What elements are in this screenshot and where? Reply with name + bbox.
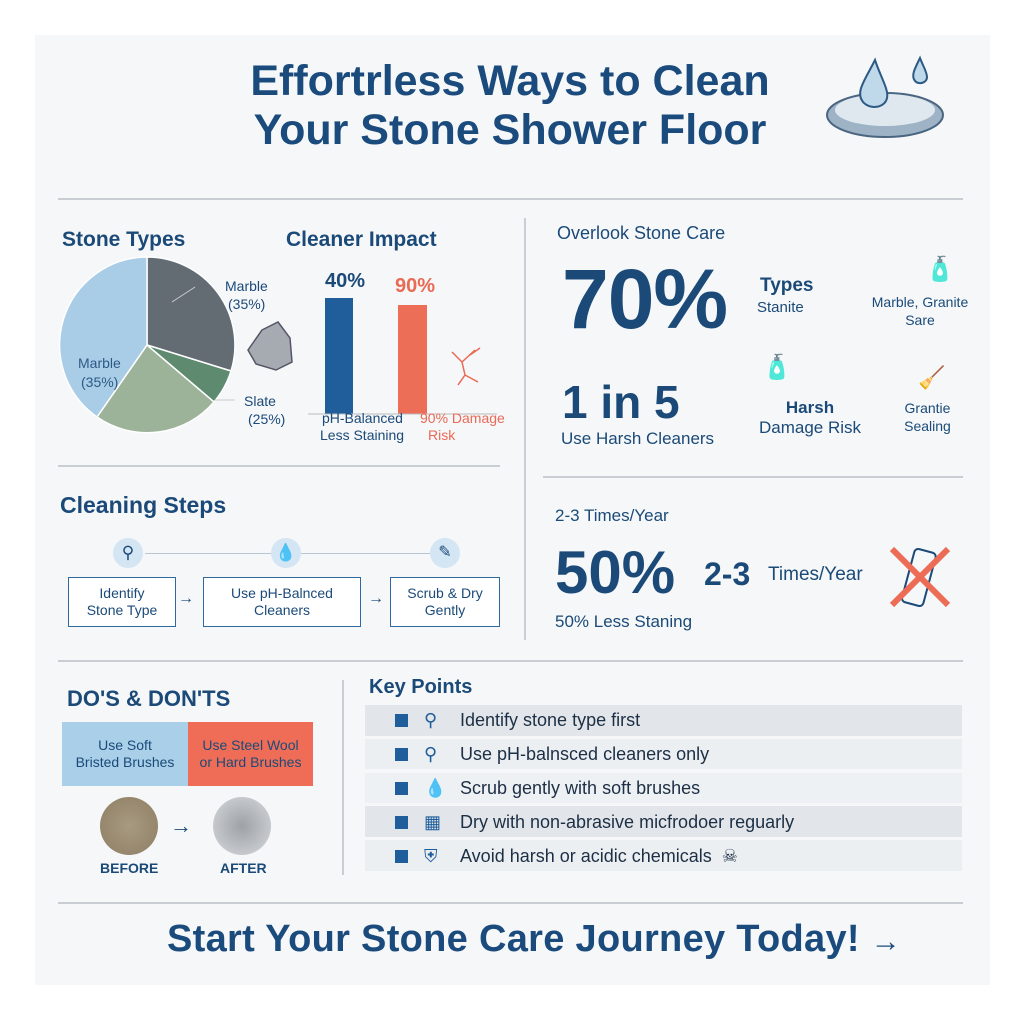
panel: overlook stone care stats: Use Harsh Cleaners (561, 429, 714, 448)
pie chart: (35%) (81, 374, 118, 390)
panel: key points: Avoid harsh or acidic chemicals ☠ (460, 846, 738, 866)
cleaning steps flow: 💧 (275, 543, 297, 562)
panel: frequency stats (555, 506, 950, 631)
panel: key points: ▦ (424, 812, 441, 832)
icon: water drops on stone (826, 56, 944, 138)
bar chart: Risk (428, 427, 456, 443)
title (250, 57, 770, 154)
title: Effortrless Ways to Clean (250, 57, 770, 105)
panel: frequency stats: 50% (555, 539, 675, 606)
bar chart: 90% (395, 275, 435, 297)
bar chart (308, 270, 505, 443)
panel: overlook stone care stats: 🧴 (925, 256, 955, 283)
panel: dos and donts: DO'S & DON'TS (67, 686, 230, 711)
panel: dos and donts: Use Steel Wool (202, 737, 299, 753)
panel: key points: Scrub gently with soft brushes (460, 778, 700, 798)
panel: overlook stone care stats: 🧴 (762, 354, 792, 381)
panel: key points: ⚲ (424, 710, 437, 730)
panel: overlook stone care stats (557, 223, 968, 448)
panel: overlook stone care stats: 1 in 5 (562, 376, 680, 428)
bar chart: Less Staining (320, 427, 404, 443)
panel: dos and donts: or Hard Brushes (200, 754, 301, 770)
panel: key points: Dry with non-abrasive micfrodoer reguarly (460, 812, 794, 832)
panel: key points: Identify stone type first (460, 710, 640, 730)
panel: overlook stone care stats: Overlook Stone Care (557, 223, 725, 243)
panel: key points (365, 676, 962, 871)
panel: frequency stats: 50% Less Staning (555, 612, 692, 631)
panel: key points: Use pH-balnsced cleaners only (460, 744, 709, 764)
cleaning steps flow: ✎ (438, 544, 452, 561)
panel: dos and donts: BEFORE (100, 860, 158, 876)
heading: cleaning steps: Cleaning Steps (60, 492, 226, 518)
title: Your Stone Shower Floor (254, 106, 766, 154)
panel: overlook stone care stats: Harsh (786, 398, 834, 417)
panel: overlook stone care stats: Grantie (905, 400, 950, 416)
panel: dos and donts: AFTER (220, 860, 267, 876)
cleaning steps flow: → (368, 590, 384, 607)
pie chart: Marble (78, 355, 121, 371)
bar chart: 90% Damage (420, 410, 505, 426)
panel: frequency stats: 2-3 Times/Year (555, 506, 669, 525)
pie chart: Marble (225, 278, 268, 294)
panel: overlook stone care stats: Sealing (904, 418, 951, 434)
pie chart: (35%) (228, 296, 265, 312)
panel: overlook stone care stats: Sare (905, 312, 935, 328)
bar chart: pH-Balanced (322, 410, 403, 426)
panel: dos and donts (62, 686, 313, 876)
panel: overlook stone care stats: Stanite (757, 299, 804, 316)
cleaning steps flow: ⚲ (122, 543, 134, 562)
panel: key points: 💧 (424, 778, 446, 798)
cleaning steps flow (68, 538, 500, 627)
cleaning steps flow: Stone Type (87, 602, 157, 618)
panel: overlook stone care stats: Types (760, 275, 814, 296)
panel: key points: ⚲ (424, 744, 437, 764)
cleaning steps flow: Gently (425, 602, 465, 618)
heading: cleaner impact: Cleaner Impact (286, 228, 437, 251)
heading: stone types: Stone Types (62, 228, 185, 251)
panel: dos and donts: → (170, 813, 192, 838)
pie chart (59, 256, 293, 434)
panel: overlook stone care stats: Marble, Granite (872, 294, 968, 310)
cleaning steps flow: Use pH-Balnced (231, 585, 333, 601)
panel: dos and donts: Use Soft (98, 737, 152, 753)
panel: frequency stats: 2-3 (704, 556, 750, 592)
panel: overlook stone care stats: 70% (562, 252, 727, 346)
pie chart: (25%) (248, 411, 285, 427)
cleaning steps flow: → (178, 590, 194, 607)
bar chart: 40% (325, 270, 365, 292)
panel: key points: ⛨ (424, 846, 438, 866)
panel: overlook stone care stats: Damage Risk (759, 418, 861, 437)
panel: key points: Key Points (369, 676, 472, 698)
panel: overlook stone care stats: 🧹 (918, 365, 945, 390)
cleaning steps flow: Cleaners (254, 602, 310, 618)
panel: frequency stats: Times/Year (768, 564, 863, 585)
pie chart: Slate (244, 393, 276, 409)
cleaning steps flow: Identify (99, 585, 145, 601)
cleaning steps flow: Scrub & Dry (407, 585, 483, 601)
panel: dos and donts: Bristed Brushes (76, 754, 174, 770)
call to action: Start Your Stone Care Journey Today! → (167, 918, 901, 960)
